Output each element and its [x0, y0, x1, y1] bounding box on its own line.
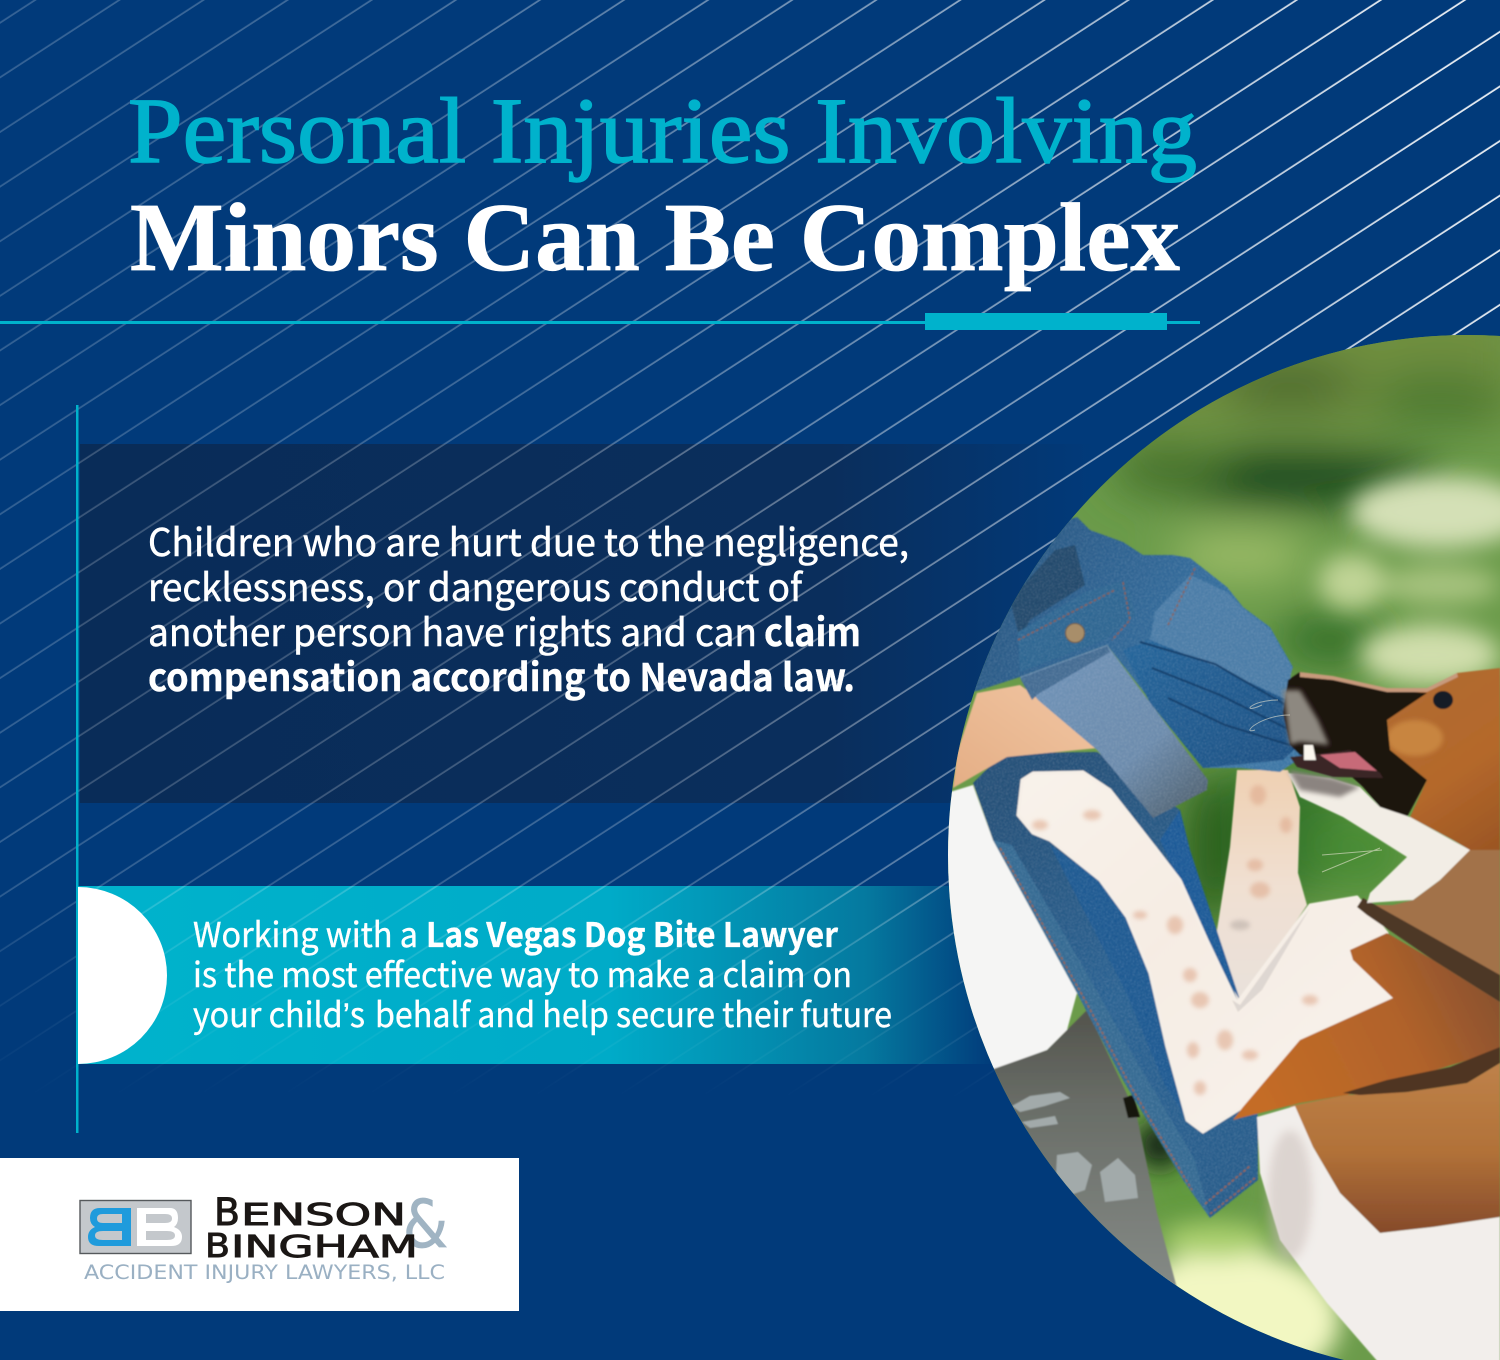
photo background: blurred foliage: [1100, 300, 1500, 1360]
text: lawyer callout: [193, 908, 892, 1037]
jacket button: [1066, 624, 1084, 642]
text: rights statement: another person have rights and can: [148, 602, 757, 657]
logo wordmark: B: [205, 1226, 230, 1265]
jacket seams: [1018, 568, 1195, 640]
logo wordmark: INGHAM: [231, 1230, 418, 1265]
camo jeans: [985, 1010, 1178, 1295]
dog near foreleg and chest: [1018, 772, 1393, 1132]
text: lawyer callout: behalf and help secure their future: [375, 988, 892, 1037]
logo wordmark: ENSON: [241, 1198, 406, 1233]
logo tagline: ACCIDENT INJURY LAWYERS, LLC: [84, 1261, 445, 1284]
panel background: rights statement: [80, 444, 1095, 803]
photo: dog biting child's jacket sleeve: [940, 300, 1500, 1360]
whiskers: [1250, 700, 1382, 872]
dog far foreleg: [1217, 770, 1307, 1005]
vertical accent line: [76, 405, 78, 1133]
title underline rule: [0, 313, 1200, 330]
dog mouth: [1290, 750, 1383, 778]
ampersand: &: [403, 1186, 448, 1263]
dog lower jaw and throat: [1288, 773, 1470, 903]
child's arm: [953, 685, 1098, 788]
dog brown flank: [1290, 1063, 1500, 1233]
fur spots: [1032, 785, 1318, 1095]
jacket upper and sleeve: [940, 517, 1305, 772]
dog eye: [1433, 691, 1453, 709]
text: rights statement: [148, 512, 909, 702]
jacket lower body: [973, 752, 1258, 1218]
title: Personal Injuries Involving: [128, 80, 1197, 183]
title: [128, 80, 1197, 291]
logo: Benson & Bingham Accident Injury Lawyers: [0, 1158, 519, 1311]
jacket stitching: [1000, 848, 1255, 1214]
dog head: [1283, 668, 1500, 903]
text: lawyer callout: Working with a: [193, 908, 418, 957]
logo wordmark: B: [214, 1191, 240, 1234]
text: rights statement: Children who are hurt due to the negligence,: [148, 512, 909, 567]
lower harness strap: [1343, 1047, 1500, 1095]
callout: white half circle: [78, 887, 167, 1064]
text: lawyer callout: your child’s: [193, 988, 365, 1037]
title: Minors Can Be Complex: [130, 184, 1180, 291]
text: lawyer callout: Las Vegas Dog Bite Lawyer: [426, 908, 838, 957]
text: lawyer callout: is the most effective way to make a claim on: [193, 948, 852, 997]
sleeve fold lines: [1140, 642, 1290, 745]
icon: BB monogram: [80, 1200, 191, 1254]
panel background: lawyer callout bar: [78, 886, 995, 1064]
dog white belly: [1257, 1106, 1500, 1360]
text: rights statement: claim: [764, 602, 861, 657]
text: rights statement: recklessness, or dangerous conduct of: [148, 557, 804, 612]
text: rights statement: compensation according to Nevada law.: [148, 647, 855, 702]
dog muzzle: [1283, 672, 1427, 817]
upper harness strap: [1357, 898, 1500, 1002]
logo wordmark: [205, 1191, 418, 1265]
t-shirt: [940, 785, 1077, 1080]
rolled denim cuff: [1020, 645, 1208, 818]
dog brown shoulder: [1233, 933, 1500, 1120]
neck fur: [1376, 849, 1500, 976]
